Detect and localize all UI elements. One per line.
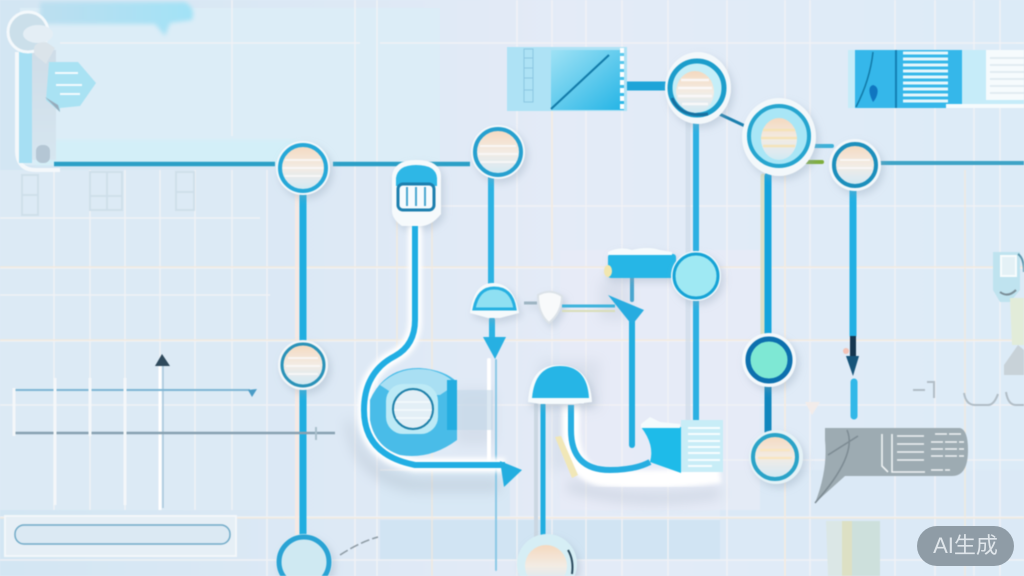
down arrow dark [843,336,859,376]
cylinder tank [604,248,676,278]
node bottom centre [517,534,577,576]
top left banner [40,2,193,36]
valve mid dome [470,283,519,318]
curved pipe to large pump [364,226,505,465]
horizontal connector to triangle [562,306,615,311]
faint blocks under main pipe [22,172,194,215]
node cyan [671,251,721,301]
icon: hexagon chat [45,62,96,112]
node green [742,333,796,387]
node top 2 [471,125,525,179]
vertical pipes [297,86,854,570]
badge: AI generated: AI生成 [933,533,998,558]
lower left axis chart [14,354,335,510]
white shield valve [524,292,562,323]
left frame pipe [17,48,60,170]
bottom left input panel [5,516,236,556]
arrow: triangle right [608,295,644,325]
node mid left [278,340,328,390]
small diamond marker [805,402,820,415]
arrow: down from dome [483,337,506,359]
top flow block left [507,47,627,112]
horizontal main pipe left [54,163,1024,164]
yellow strip [555,436,578,478]
arrow: pump outlet [500,461,522,487]
output tray block [641,417,723,473]
faint brackets right [913,382,1024,405]
node top 5 [829,139,881,191]
node top 3 [665,52,731,124]
node bottom left [276,534,332,576]
icon: valve box [392,160,441,226]
dome valve large [528,365,592,404]
large pump [370,368,493,456]
soft shadows behind pipe work [345,280,720,503]
node bottom right [749,430,803,484]
node top 1 [276,141,330,195]
U pipe [571,405,720,479]
dashed curve bottom [340,537,378,555]
icon: top left ring [8,12,55,64]
badge: AI generated [917,526,1014,566]
right edge shaft [1004,298,1024,375]
top flow block right [848,50,1024,108]
bottom right column [826,521,880,576]
node top 4 [742,98,816,176]
right edge icon [993,252,1024,302]
grey label card [815,428,968,503]
